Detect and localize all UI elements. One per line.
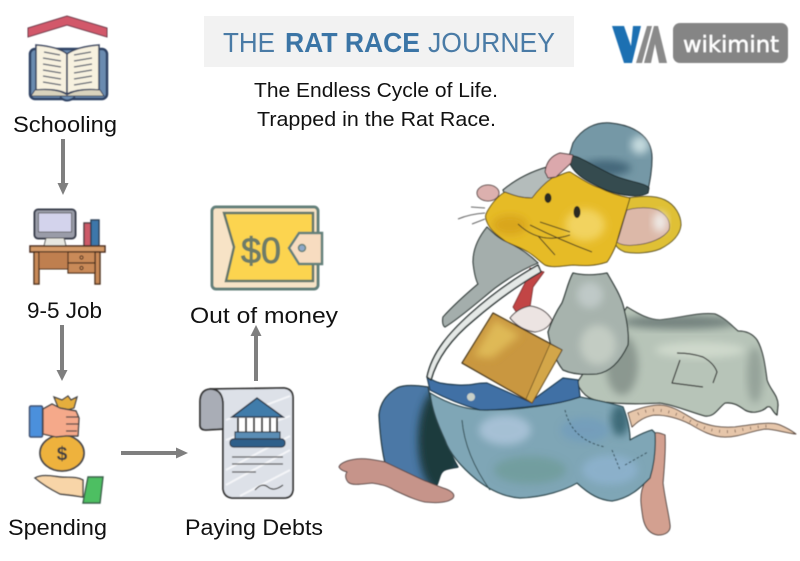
icon: desk with computer [30,210,105,284]
icon: spending money bag and hands: $ [57,444,68,465]
necktie [513,268,544,313]
trousers [430,393,655,501]
whiskers [458,207,485,224]
ear: large [615,196,681,253]
bowler hat [568,123,652,196]
icon: empty wallet: $0 [241,230,281,271]
front foot [641,433,670,535]
back leg [379,386,462,492]
ear: small [477,185,499,201]
arrow: spending to paying debts [121,448,188,458]
icon: schooling book [28,16,107,100]
label: 9-5 job: 9-5 Job [27,298,102,323]
icon: empty wallet [212,207,322,289]
title banner: THE [223,27,275,58]
logo: wikimint [612,23,788,63]
arrow: job to spending [56,325,68,381]
coat body [548,273,628,374]
subtitle: The Endless Cycle of Life. [254,79,498,102]
rat tail [628,405,796,437]
label: schooling: Schooling [13,112,117,137]
yellow head [486,172,630,267]
raised arm [503,167,553,200]
back foot [339,459,454,503]
title banner: RAT RACE [285,27,420,58]
briefcase [462,313,562,403]
arrow: paying debts to out of money [250,325,262,381]
long grey arm and strap [427,227,541,380]
logo: wikimint: wikimint [683,33,779,58]
title banner: JOURNEY [428,27,555,58]
icon: paying debts document [200,388,293,498]
belt [427,377,580,410]
title banner [204,16,574,67]
cape coat tail [577,307,778,416]
arrow: schooling to job [58,139,68,195]
label: paying debts: Paying Debts [185,515,323,540]
icon: spending money bag and hands [30,396,103,503]
label: out of money: Out of money [190,303,338,328]
label: spending: Spending [8,515,107,540]
illustration: running rat in a suit [339,123,796,535]
subtitle: Trapped in the Rat Race. [257,108,496,131]
hand on hat [545,153,573,178]
subtitle [254,79,498,131]
hand on briefcase handle [510,306,552,332]
